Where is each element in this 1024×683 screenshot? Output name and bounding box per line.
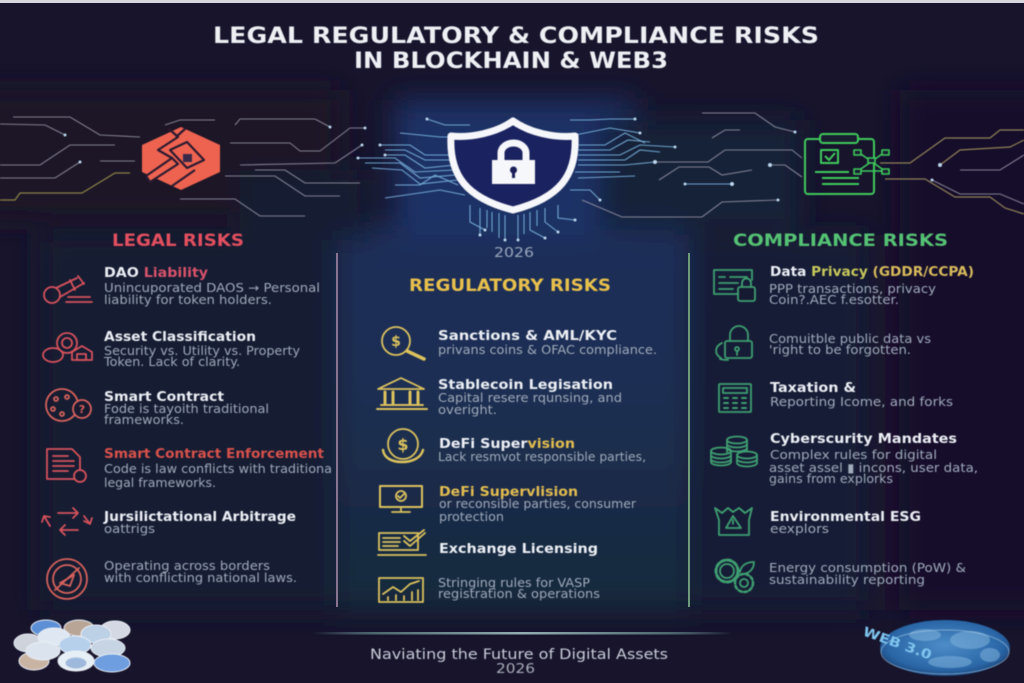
- item: right to be forgotten: [716, 326, 931, 360]
- footer divider: [313, 632, 732, 634]
- item: cross-border: [47, 559, 297, 599]
- item: DeFi supervision: $: [397, 435, 409, 454]
- item: smart contract: ?: [79, 403, 85, 416]
- footer text: 2026: [496, 662, 535, 677]
- item: energy consumption: Energy consumption (PoW) &: [769, 561, 966, 575]
- item: DeFi supervision second: protection: [439, 510, 504, 524]
- divider: regulatory and compliance: [688, 253, 690, 607]
- item: taxation: Taxation &: [770, 380, 856, 396]
- item: stablecoin legislation: [377, 377, 622, 417]
- item: data privacy: PPP transactions, privacy: [769, 282, 936, 296]
- item: DeFi supervision: DeFi Super vision: [439, 436, 575, 452]
- item: smart contract: frameworks.: [104, 413, 184, 427]
- panel: legal risks: [42, 231, 332, 599]
- item: exchange licensing: Exchange Licensing: [439, 541, 598, 557]
- item: environmental ESG: eexplors: [770, 522, 829, 536]
- panel: compliance risks: [711, 231, 978, 592]
- icon: gavel hexagon: [142, 127, 220, 190]
- item: smart contract enforcement: Smart Contract Enforcement: [104, 446, 325, 462]
- item: right to be forgotten: 'right to be forgotten.: [769, 343, 911, 357]
- item: VASP rules: registration & operations: [438, 587, 600, 601]
- item: cross-border: with conflicting national laws.: [104, 571, 297, 585]
- item: stablecoin legislation: Stablecoin Legisation: [438, 377, 613, 393]
- circuit board lines: [0, 113, 1024, 242]
- item: VASP rules: [379, 576, 600, 602]
- item: VASP rules: Stringing rules for VASP: [438, 576, 590, 590]
- item: cybersecurity mandates: Cyberscurity Mandates: [770, 431, 957, 447]
- item: smart contract: Fode is tayoith traditional: [104, 402, 269, 416]
- heading: compliance risks: COMPLIANCE RISKS: [733, 231, 948, 250]
- item: jurisdictional arbitrage: oattrigs: [104, 522, 155, 536]
- icon: web 3.0 globe: WEB 3.0: [861, 625, 933, 663]
- item: jurisdictional arbitrage: [42, 508, 296, 536]
- item: cybersecurity mandates: asset assel ▮ incons, user data,: [769, 461, 978, 475]
- item: taxation: Reporting Icome, and forks: [770, 395, 953, 409]
- item: cybersecurity mandates: gains from explorks: [769, 472, 893, 486]
- item: cybersecurity mandates: Complex rules for digital: [770, 448, 937, 462]
- item: cybersecurity mandates: [711, 431, 978, 486]
- item: DeFi supervision second: DeFi Supervlision: [439, 484, 578, 500]
- item: asset classification: Token. Lack of clarity.: [103, 355, 240, 369]
- year label under shield: 2026: [494, 246, 534, 261]
- title: IN BLOCKHAIN & WEB3: [354, 49, 668, 74]
- panel: regulatory risks: [377, 276, 657, 602]
- title: LEGAL REGULATORY & COMPLIANCE RISKS: [213, 24, 819, 49]
- heading: regulatory risks: REGULATORY RISKS: [409, 276, 611, 295]
- item: smart contract enforcement: legal frameworks.: [104, 476, 216, 490]
- item: jurisdictional arbitrage: Jursilictational Arbitrage: [103, 509, 296, 525]
- icon: crypto coins: [14, 620, 130, 672]
- item: data privacy: Coin?.AEC f.esotter.: [769, 293, 899, 307]
- item: sanctions: privans coins & OFAC compliance.: [438, 343, 657, 357]
- item: DeFi supervision second: or reconsible parties, consumer: [439, 497, 636, 511]
- item: energy consumption: [716, 560, 966, 592]
- item: DAO liability: Unincuporated DAOS → Personal: [104, 281, 320, 295]
- icon: compliance clipboard: [805, 134, 889, 194]
- icon: web 3.0 globe: [861, 620, 1010, 676]
- footer text: Naviating the Future of Digital Assets: [370, 647, 668, 663]
- item: cross-border: Operating across borders: [104, 559, 270, 573]
- heading: legal risks: LEGAL RISKS: [112, 231, 244, 250]
- item: DAO liability: DAO Liability: [104, 265, 208, 281]
- item: stablecoin legislation: overight.: [438, 403, 497, 417]
- item: smart contract: Smart Contract: [104, 389, 225, 405]
- item: DAO liability: liability for token holders.: [104, 293, 272, 307]
- divider: legal and regulatory: [336, 253, 338, 607]
- item: DeFi supervision second: [380, 484, 636, 524]
- item: DAO liability: [44, 265, 320, 307]
- item: asset classification: [43, 329, 300, 369]
- item: asset classification: Security vs. Utility vs. Property: [104, 344, 300, 358]
- icon: shield with padlock: [451, 121, 575, 210]
- item: DeFi supervision: [383, 429, 646, 464]
- item: stablecoin legislation: Capital resere rqunsing, and: [438, 391, 622, 405]
- item: sanctions: [382, 327, 657, 359]
- item: exchange licensing: [378, 530, 598, 557]
- item: environmental ESG: Environmental ESG: [770, 509, 921, 525]
- item: environmental ESG: [715, 508, 921, 536]
- item: asset classification: Asset Classification: [104, 329, 256, 345]
- item: smart contract enforcement: [47, 446, 332, 490]
- item: smart contract enforcement: Code is law conflicts with traditiona: [104, 462, 332, 476]
- item: data privacy: Data Privacy (GDDR/CCPA): [770, 264, 974, 280]
- item: DeFi supervision: Lack resmvot responsible parties,: [438, 450, 646, 464]
- title: [213, 24, 819, 74]
- item: smart contract: [46, 389, 269, 427]
- item: sanctions: Sanctions & AML/KYC: [438, 328, 617, 344]
- item: energy consumption: sustainability reporting: [769, 573, 925, 587]
- footer text: [370, 647, 668, 677]
- item: sanctions: $: [391, 334, 401, 350]
- item: data privacy: [714, 264, 974, 307]
- item: taxation: [719, 380, 953, 412]
- item: right to be forgotten: Comuitble public data vs: [769, 332, 931, 346]
